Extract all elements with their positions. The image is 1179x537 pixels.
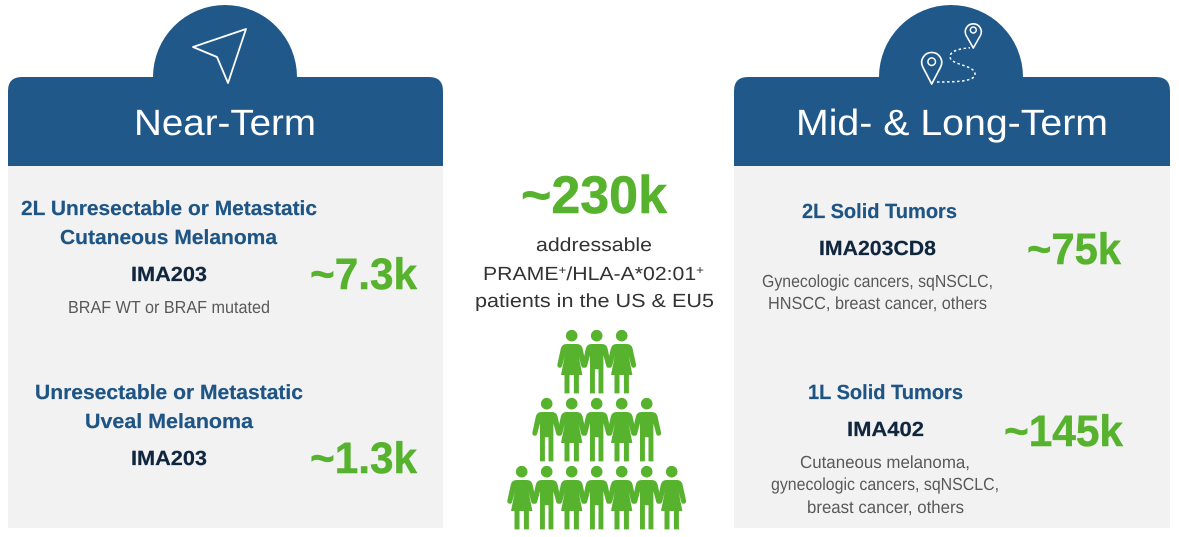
panel background: near-term xyxy=(8,160,443,528)
indication: 2L solid tumors: 2L Solid Tumors xyxy=(802,200,957,223)
indication: 1L solid tumors: IMA402 xyxy=(847,418,924,441)
panel: mid- and long-term xyxy=(734,5,1170,528)
center description: + xyxy=(559,263,566,277)
panel: near-term xyxy=(8,5,443,528)
indication: cutaneous melanoma: Cutaneous Melanoma xyxy=(60,226,278,249)
center description xyxy=(475,235,714,312)
center description: /HLA-A*02:01 xyxy=(566,264,696,285)
indication: 1L solid tumors: breast cancer, others xyxy=(807,497,964,517)
indication: 1L solid tumors: gynecologic cancers, sqNSCLC, xyxy=(771,474,999,494)
indication: cutaneous melanoma: BRAF WT or BRAF mutated xyxy=(68,297,270,317)
indication: 2L solid tumors: Gynecologic cancers, sqNSCLC, xyxy=(762,271,993,291)
icon: route with map pins xyxy=(922,24,981,84)
icon: navigation arrow xyxy=(193,29,246,83)
indication: 2L solid tumors: IMA203CD8 xyxy=(819,237,936,260)
indication: cutaneous melanoma xyxy=(21,197,317,317)
center description: PRAME xyxy=(483,264,551,285)
indication: 1L solid tumors: 1L Solid Tumors xyxy=(808,381,963,404)
header: mid- and long-term banner xyxy=(734,5,1170,166)
center description: patients in the US & EU5 xyxy=(475,291,714,312)
number: 7.3k patients: ~7.3k xyxy=(310,250,417,299)
heading: mid- and long-term: Mid- & Long-Term xyxy=(796,102,1108,143)
indication: 2L solid tumors xyxy=(762,200,993,313)
indication: uveal melanoma: IMA203 xyxy=(131,447,207,470)
number: 145k patients: ~145k xyxy=(1004,407,1124,456)
center description: + xyxy=(696,263,704,277)
panel background: mid- and long-term xyxy=(734,160,1170,528)
indication: uveal melanoma: Unresectable or Metastatic xyxy=(35,381,303,404)
center description: addressable xyxy=(536,235,652,256)
indication: uveal melanoma xyxy=(35,381,303,470)
indication: cutaneous melanoma: IMA203 xyxy=(131,263,207,286)
center total: 230k patients: ~230k xyxy=(521,166,668,225)
number: 75k patients: ~75k xyxy=(1027,225,1122,274)
indication: 2L solid tumors: HNSCC, breast cancer, others xyxy=(768,293,987,313)
header: near-term banner xyxy=(8,5,443,166)
number: 1.3k patients: ~1.3k xyxy=(310,434,417,483)
indication: cutaneous melanoma: 2L Unresectable or Metastatic xyxy=(21,197,317,220)
heading: near-term: Near-Term xyxy=(134,102,316,143)
indication: 1L solid tumors: Cutaneous melanoma, xyxy=(800,452,970,472)
indication: uveal melanoma: Uveal Melanoma xyxy=(85,410,254,433)
icon: pyramid of people xyxy=(507,330,686,529)
indication: 1L solid tumors xyxy=(771,381,999,517)
